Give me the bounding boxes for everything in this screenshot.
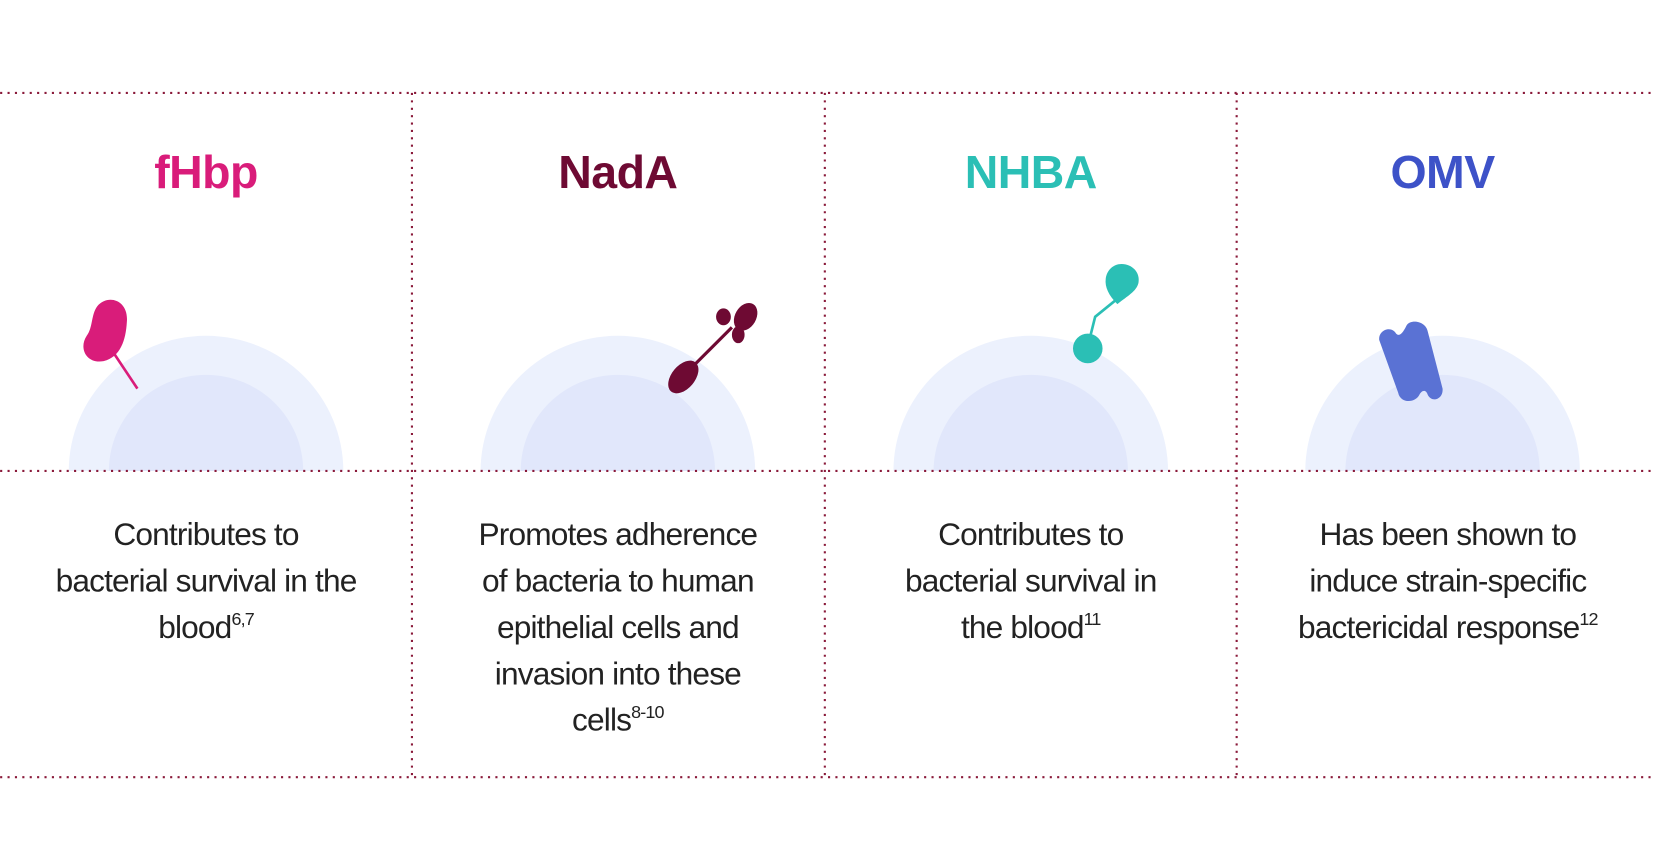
title: NadA: NadA <box>558 146 677 198</box>
cell illustration: OMV <box>1306 322 1580 471</box>
panel: OMV <box>1298 146 1599 645</box>
text: NHBA description: Contributes to <box>938 516 1123 552</box>
text: NadA description: cells <box>572 702 665 738</box>
text: NadA description: Promotes adherence <box>479 516 757 552</box>
text: NHBA description: the blood <box>961 609 1101 645</box>
cell illustration: NHBA <box>894 264 1168 471</box>
text: fHbp description: Contributes to <box>113 516 299 552</box>
cell illustration: fHbp <box>69 300 344 471</box>
text: NadA description: 8-10 <box>631 702 665 722</box>
panel: NHBA <box>893 146 1168 645</box>
text: fHbp description: 6,7 <box>231 609 255 629</box>
text: NadA description: epithelial cells and <box>497 609 739 645</box>
text: OMV description: 12 <box>1579 609 1599 629</box>
title: fHbp: fHbp <box>154 146 258 198</box>
title: NHBA: NHBA <box>965 146 1097 198</box>
text: fHbp description: bacterial survival in the <box>56 562 357 598</box>
text: NHBA description: bacterial survival in <box>905 562 1156 598</box>
text: fHbp description: blood <box>158 609 255 645</box>
text: OMV description: Has been shown to <box>1320 516 1576 552</box>
panel: NadA <box>479 146 762 738</box>
title: OMV: OMV <box>1390 146 1495 198</box>
panel: fHbp <box>56 146 357 645</box>
text: NHBA description: 11 <box>1084 609 1101 629</box>
cell illustration: NadA <box>480 303 758 471</box>
text: OMV description: induce strain-specific <box>1309 562 1586 598</box>
text: NadA description: invasion into these <box>495 655 741 691</box>
text: NadA description: of bacteria to human <box>482 562 754 598</box>
text: OMV description: bactericidal response <box>1298 609 1599 645</box>
